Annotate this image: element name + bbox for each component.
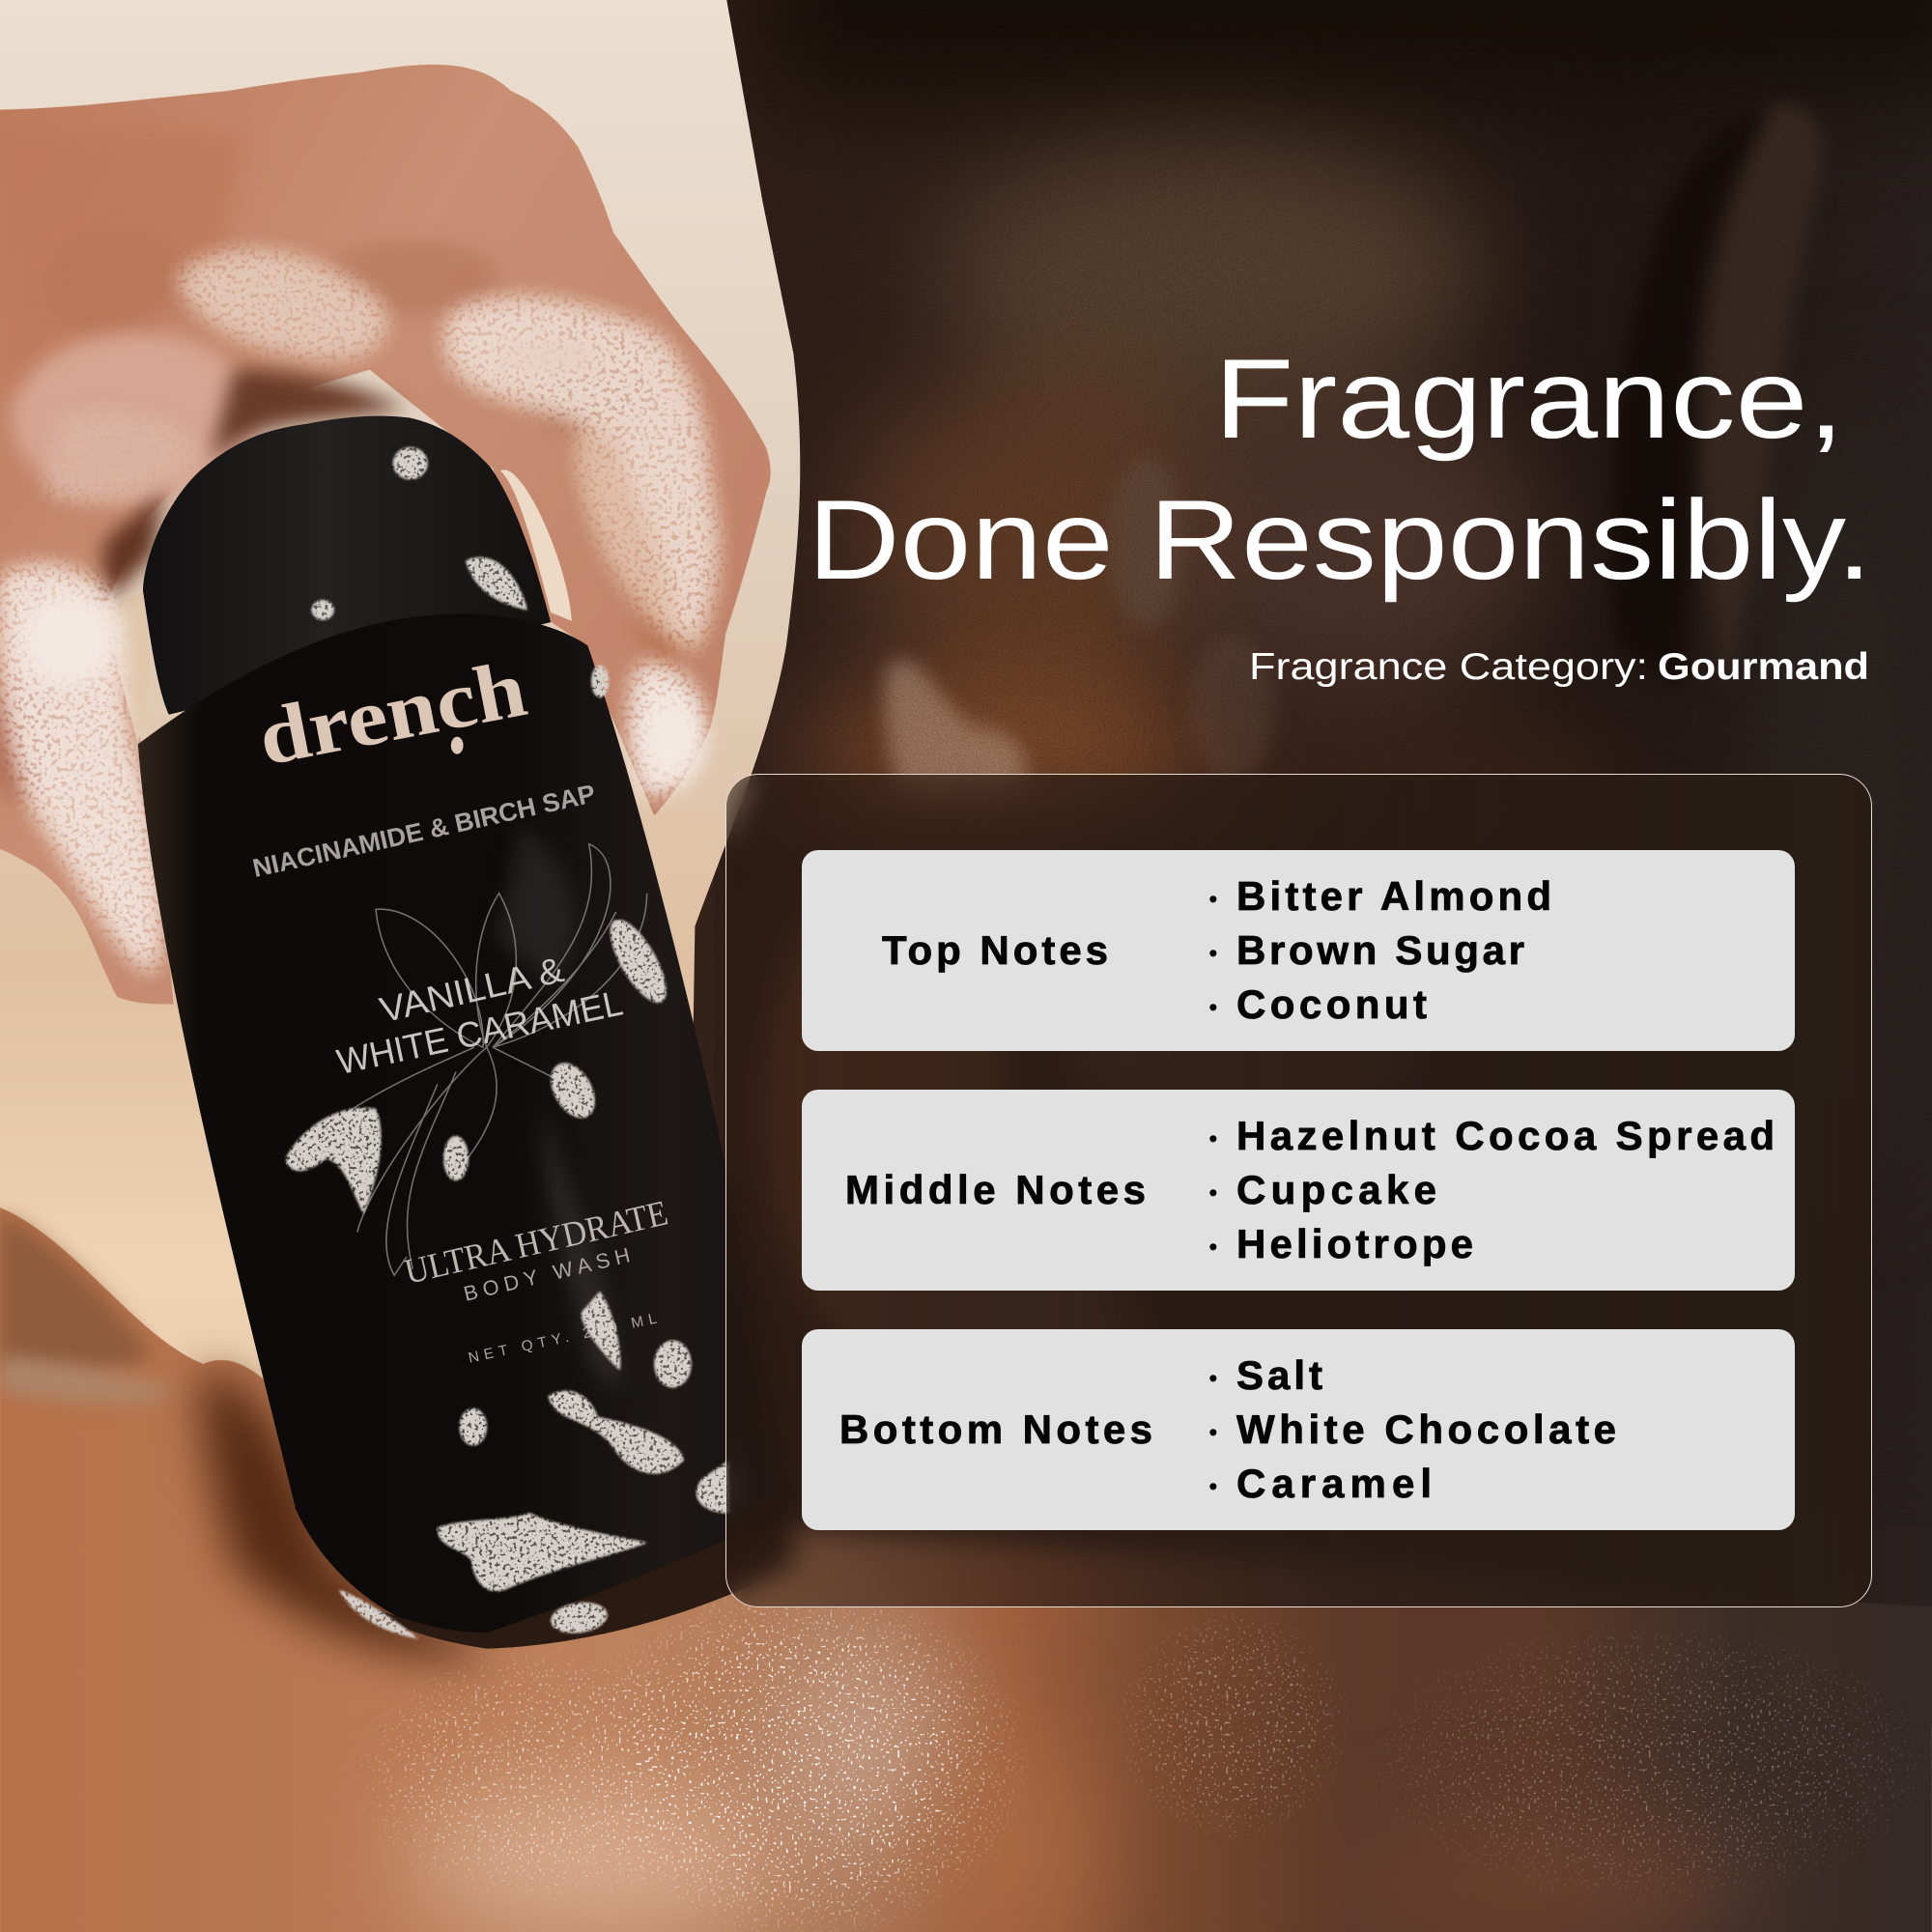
subtitle: fragrance category xyxy=(1249,646,1869,688)
foam on bottle xyxy=(286,447,729,1638)
hand xyxy=(0,65,771,1005)
card: middle notes: Hazelnut Cocoa Spread xyxy=(1236,1113,1775,1158)
title xyxy=(808,335,1872,603)
card: bottom notes: • xyxy=(1209,1474,1217,1498)
card: middle notes: • xyxy=(1209,1126,1217,1151)
card: top notes: • xyxy=(1209,995,1217,1019)
card: top notes: Brown Sugar xyxy=(1236,927,1524,973)
panel: fragrance notes xyxy=(725,774,1872,1607)
card: top notes: Bitter Almond xyxy=(1236,873,1551,919)
product label text on bottle: WHITE CARAMEL xyxy=(333,982,626,1082)
card: bottom notes: Salt xyxy=(1236,1352,1322,1398)
card: bottom notes: • xyxy=(1209,1366,1217,1390)
card: top notes: • xyxy=(1209,887,1217,911)
card: bottom notes: • xyxy=(1209,1420,1217,1444)
hand foam xyxy=(0,253,715,974)
card: top notes xyxy=(802,850,1795,1051)
card: bottom notes: Bottom Notes xyxy=(839,1406,1152,1452)
product label text on bottle: drench xyxy=(251,643,533,783)
card: top notes: Top Notes xyxy=(882,927,1108,973)
card: middle notes: • xyxy=(1209,1235,1217,1259)
card: middle notes: Heliotrope xyxy=(1236,1221,1473,1266)
card: top notes: • xyxy=(1209,941,1217,965)
product label text on bottle: NIACINAMIDE & BIRCH SAP xyxy=(250,779,598,883)
card: middle notes: Middle Notes xyxy=(845,1167,1146,1212)
card: bottom notes xyxy=(802,1329,1795,1530)
icon: vanilla flower line art xyxy=(286,844,647,1275)
card: top notes: Coconut xyxy=(1236,981,1427,1027)
subtitle: fragrance category: Gourmand xyxy=(1658,646,1869,688)
ear xyxy=(1612,104,1822,690)
product label text on bottle: NET QTY. 250 ML xyxy=(467,1311,658,1367)
card: middle notes: Cupcake xyxy=(1236,1167,1436,1212)
product label text on bottle: VANILLA & xyxy=(376,950,568,1030)
product label text on bottle: ULTRA HYDRATE xyxy=(401,1192,671,1292)
subtitle: fragrance category: Fragrance Category: xyxy=(1249,646,1648,688)
card: bottom notes: White Chocolate xyxy=(1236,1406,1616,1452)
foam on neck xyxy=(761,460,1275,1329)
card: middle notes: • xyxy=(1209,1180,1217,1205)
product label text on bottle xyxy=(250,643,671,1367)
card: bottom notes: Caramel xyxy=(1236,1461,1432,1506)
title: Fragrance, xyxy=(1214,335,1844,462)
bottle xyxy=(143,416,551,715)
title: Done Responsibly. xyxy=(808,476,1872,603)
card: middle notes xyxy=(802,1090,1795,1291)
product label text on bottle: BODY WASH xyxy=(461,1242,632,1306)
